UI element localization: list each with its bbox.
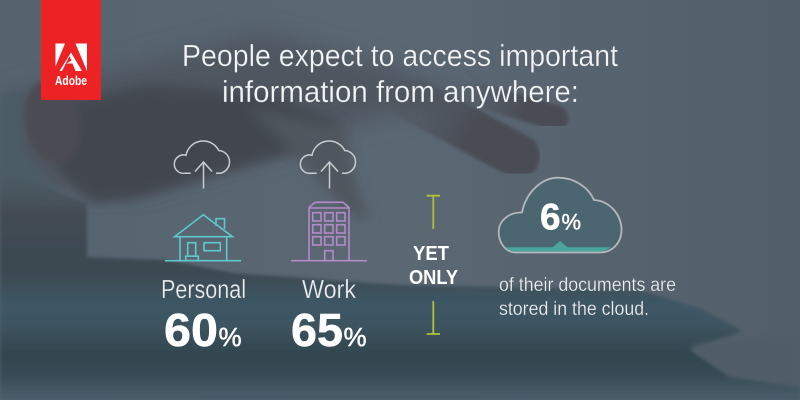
stat: 65%: %: [344, 322, 367, 352]
icon: office building: [291, 202, 367, 261]
yet only label: [409, 243, 459, 289]
icon: cloud 6%: [499, 178, 622, 252]
stat: 6%: %: [562, 210, 581, 234]
caption: stored in the cloud.: [499, 299, 649, 320]
icon: adobe mark: [56, 44, 87, 71]
stat: 6%: [540, 196, 581, 238]
logo wordmark: Adobe: [55, 73, 87, 88]
title: information from anywhere:: [222, 74, 579, 109]
stat: 60%: %: [218, 322, 242, 352]
label: personal: Personal: [161, 274, 246, 304]
bracket top: [427, 196, 440, 229]
yet only label: YET: [413, 243, 449, 265]
caption: [499, 275, 676, 320]
label: work: Work: [302, 274, 357, 304]
bracket bottom: [427, 301, 440, 334]
stat: 60%: 60: [164, 304, 218, 356]
icon: cloud upload work: [300, 141, 356, 188]
icon: cloud upload personal: [174, 141, 230, 188]
icon: house: [165, 215, 241, 261]
teal fill level: [505, 241, 611, 252]
stat: 60%: [164, 304, 242, 356]
adobe logo panel: [41, 0, 101, 100]
yet only label: ONLY: [409, 267, 459, 289]
title: People expect to access important: [182, 38, 618, 73]
caption: of their documents are: [499, 275, 676, 296]
stat: 6%: 6: [540, 196, 561, 238]
stat: 65%: 65: [291, 304, 343, 356]
stat: 65%: [291, 304, 367, 356]
title: [182, 38, 618, 109]
